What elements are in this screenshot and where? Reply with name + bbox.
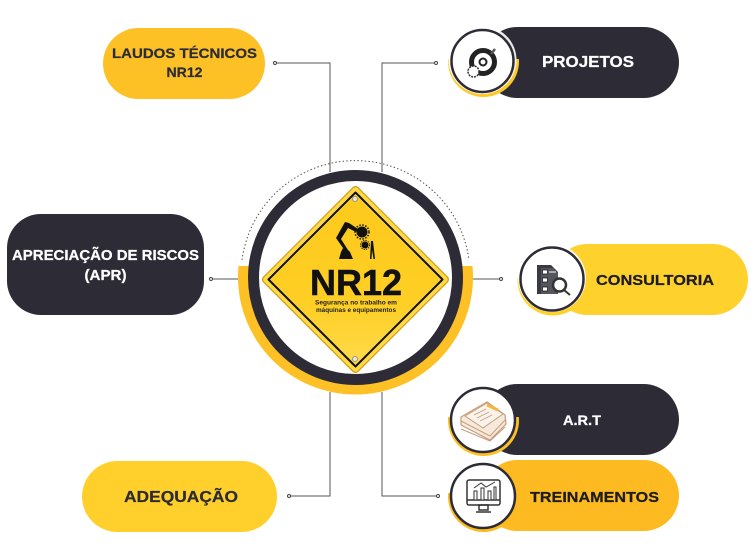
- panel: A.R.T: [448, 384, 679, 456]
- sign subtitle: Segurança no trabalho em: [315, 300, 397, 306]
- warning sign: [266, 190, 445, 369]
- panel: treinamentos: [448, 460, 679, 532]
- panel: A.R.T: A.R.T: [563, 412, 601, 428]
- icon: monitor with chart: [448, 461, 519, 532]
- panel: laudos técnicos: [103, 28, 265, 99]
- icon: checklist with magnifier: [518, 244, 588, 316]
- panel: adequação: [82, 461, 277, 532]
- icon: stack of documents: [448, 385, 519, 456]
- dotted arc: [242, 161, 469, 260]
- sign subtitle: [315, 300, 397, 314]
- panel: consultoria: CONSULTORIA: [596, 272, 714, 289]
- sign subtitle: máquinas e equipamentos: [316, 307, 396, 314]
- yellow lower ring: [238, 266, 473, 394]
- sign title: NR12: [310, 262, 402, 303]
- panel: projetos: PROJETOS: [542, 54, 634, 71]
- panel: apreciação de riscos: [7, 214, 204, 315]
- connector lines: [210, 62, 502, 498]
- panel: apreciação de riscos: APRECIAÇÃO DE RISCOS: [12, 246, 199, 264]
- panel: consultoria: [518, 244, 748, 316]
- panel: adequação: ADEQUAÇÃO: [124, 486, 238, 506]
- central NR12 badge: [238, 160, 473, 394]
- icon: robot arm: [336, 222, 375, 259]
- panel: treinamentos: TREINAMENTOS: [530, 489, 659, 506]
- icon: target: [448, 26, 519, 97]
- dark ring: [254, 176, 458, 380]
- panel: projetos: [448, 26, 679, 98]
- panel: apreciação de riscos: (APR): [84, 268, 127, 284]
- panel: laudos técnicos: LAUDOS TÉCNICOS: [112, 45, 257, 61]
- panel: laudos técnicos: NR12: [166, 64, 203, 80]
